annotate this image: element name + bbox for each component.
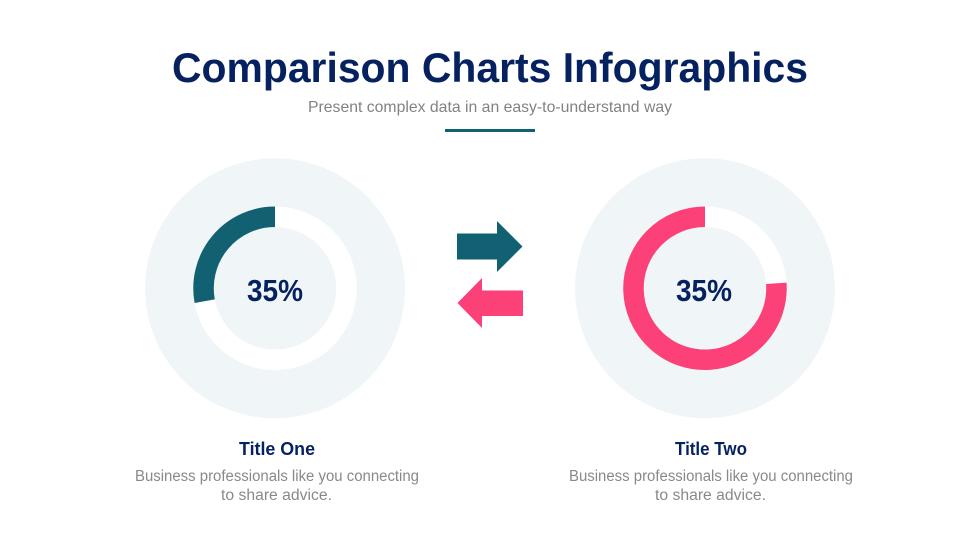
donut background disc: [145, 158, 405, 418]
donut value arc: [204, 217, 275, 301]
donut track: [204, 217, 346, 360]
right heading: Title Two: [675, 439, 747, 459]
text block: right: [569, 439, 853, 504]
left body text: to share advice.: [221, 487, 332, 504]
right body text: to share advice.: [655, 487, 766, 504]
donut percentage: 35%: [247, 273, 303, 308]
left heading: Title One: [239, 439, 315, 459]
subtitle: Present complex data in an easy-to-understand way: [308, 99, 672, 116]
right body text: Business professionals like you connecting: [569, 468, 853, 485]
donut track: [634, 217, 776, 360]
donut background disc: [575, 158, 835, 418]
title underline: [445, 129, 535, 132]
arrow: left pointing: [458, 278, 523, 328]
arrow: right pointing: [457, 221, 522, 272]
text block: left: [135, 439, 419, 504]
panel: left donut chart: [145, 158, 405, 418]
panel: right donut chart: [575, 158, 835, 418]
left body text: Business professionals like you connecting: [135, 468, 419, 485]
donut value arc: [633, 217, 776, 360]
donut percentage: 35%: [676, 273, 732, 308]
title: Comparison Charts Infographics: [172, 44, 808, 91]
